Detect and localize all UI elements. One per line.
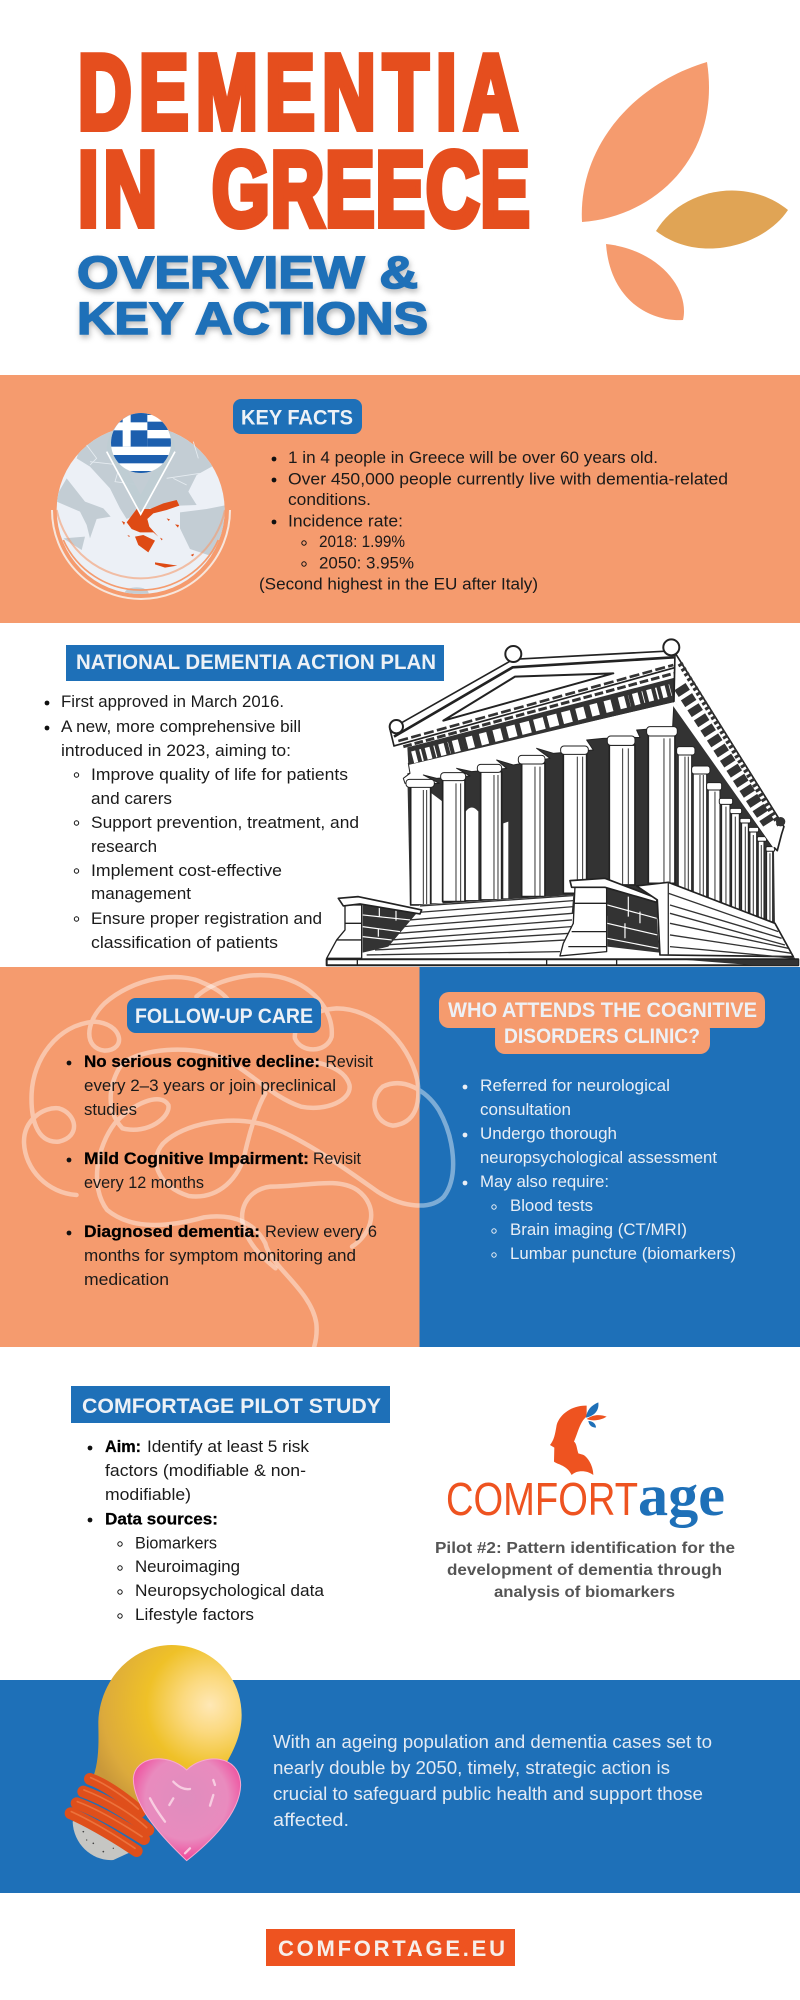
text: pilot list: Biomarkers	[135, 1534, 217, 1552]
text: who attends list: Referred for neurological	[480, 1076, 670, 1095]
back column stubs	[432, 793, 508, 903]
text: follow-up list: every 12 months	[84, 1173, 204, 1192]
text: who attends list: neuropsychological assessment	[480, 1148, 717, 1167]
heading: who attends: DISORDERS CLINIC?	[504, 1024, 700, 1048]
base	[327, 959, 798, 965]
logo: comfortage: COMFORT	[446, 1473, 638, 1525]
text: pilot list: Identify at least 5 risk	[147, 1437, 310, 1456]
icon: greek temple	[327, 639, 798, 965]
text: key facts list: 2050: 3.95%	[319, 554, 414, 572]
front columns	[411, 735, 675, 905]
text: national plan list: Implement cost-effective	[91, 861, 282, 880]
text: national plan list: management	[91, 884, 191, 903]
capitals	[406, 727, 677, 787]
text: who attends list: Undergo thorough	[480, 1124, 617, 1143]
panel: conclusion	[0, 1645, 800, 1893]
side roof	[674, 653, 784, 851]
text: national plan list: Ensure proper registration and	[91, 909, 322, 928]
text: who attends list: Lumbar puncture (biomarkers)	[510, 1244, 736, 1263]
title: GREECE	[212, 130, 530, 249]
text: national plan list: and carers	[91, 789, 172, 808]
text: key facts list: 2018: 1.99%	[319, 532, 405, 551]
footer: website	[266, 1929, 515, 1966]
text: who attends list: May also require:	[480, 1172, 609, 1191]
stairs	[363, 895, 573, 958]
text: conclusion: With an ageing population and dementia cases set to	[273, 1732, 712, 1752]
entablature	[403, 702, 674, 783]
text: who attends list: Blood tests	[510, 1196, 593, 1215]
text: key facts list: conditions.	[288, 490, 371, 509]
text: pilot list	[88, 1437, 325, 1624]
text: follow-up list	[67, 1052, 377, 1289]
panel: comfortage pilot study	[71, 1386, 735, 1624]
icon: map of Greece with flag pin	[52, 412, 230, 599]
icon: light bulb with heart	[71, 1645, 242, 1861]
text: key facts list: Incidence rate:	[288, 512, 403, 530]
heading: key facts: KEY FACTS	[241, 406, 353, 430]
heading: national plan	[66, 645, 444, 681]
text: national plan list: A new, more comprehensive bill	[61, 717, 301, 736]
text: conclusion: crucial to safeguard public health and support those	[273, 1784, 703, 1804]
text: who attends list: Brain imaging (CT/MRI)	[510, 1220, 687, 1239]
heading: who attends: WHO ATTENDS THE COGNITIVE	[448, 998, 757, 1022]
text: pilot caption: development of dementia through	[447, 1562, 722, 1579]
logo: comfortage: age	[638, 1462, 725, 1528]
heading: national plan: NATIONAL DEMENTIA ACTION PLAN	[76, 650, 436, 674]
heading: follow-up care: FOLLOW-UP CARE	[135, 1004, 313, 1028]
text: pilot list: Neuropsychological data	[135, 1581, 325, 1600]
text: key facts list	[259, 448, 728, 594]
icon: leaves	[582, 62, 788, 320]
subtitle: OVERVIEW &	[77, 247, 418, 298]
subtitle	[77, 247, 428, 344]
left plinth	[327, 905, 362, 958]
panel: key facts	[0, 375, 800, 623]
pediment and cornice	[390, 651, 676, 746]
text: follow-up list: every 2–3 years or join preclinical	[84, 1076, 336, 1095]
text: pilot list: modifiable)	[105, 1485, 191, 1504]
logo: comfortage	[446, 1402, 725, 1528]
footer: website: COMFORTAGE.EU	[278, 1936, 505, 1961]
title: IN	[78, 130, 157, 249]
text: who attends list	[463, 1076, 736, 1263]
text: pilot list: factors (modifiable & non-	[105, 1461, 306, 1480]
text: national plan list: research	[91, 837, 157, 856]
heading: who attends	[439, 992, 765, 1054]
text: national plan list: introduced in 2023, aiming to:	[61, 741, 291, 760]
text: conclusion: nearly double by 2050, timely, strategic action is	[273, 1758, 670, 1778]
text: pilot caption	[435, 1540, 735, 1601]
text: national plan list	[45, 692, 359, 952]
squiggle line	[24, 975, 453, 1348]
side capitals	[677, 747, 775, 851]
text: pilot list: Aim:	[105, 1438, 141, 1456]
icon: Greece mainland and islands	[122, 500, 194, 568]
text: follow-up list: Diagnosed dementia:	[84, 1223, 260, 1241]
text: national plan list: First approved in March 2016.	[61, 692, 284, 711]
text: pilot list: Data sources:	[105, 1510, 218, 1528]
text: follow-up list: studies	[84, 1100, 137, 1119]
text: who attends list: consultation	[480, 1100, 571, 1119]
text: follow-up list: Revisit	[326, 1052, 373, 1071]
text: key facts list: 1 in 4 people in Greece will be over 60 years old.	[288, 448, 658, 467]
text: national plan list: Improve quality of life for patients	[91, 765, 348, 784]
text: follow-up list: Mild Cognitive Impairment:	[84, 1150, 309, 1168]
text: key facts list: (Second highest in the EU after Italy)	[259, 574, 538, 594]
panel: national dementia action plan	[45, 639, 798, 965]
side columns	[678, 752, 773, 923]
heading: pilot study: COMFORTAGE PILOT STUDY	[82, 1394, 381, 1418]
text: follow-up list: No serious cognitive decline:	[84, 1053, 320, 1071]
text: follow-up list: Revisit	[313, 1149, 361, 1168]
heading: pilot study	[71, 1386, 390, 1423]
frieze	[407, 678, 675, 765]
acroteria	[390, 639, 679, 733]
text: conclusion	[273, 1732, 712, 1830]
title	[78, 33, 530, 249]
subtitle: KEY ACTIONS	[77, 293, 428, 344]
text: national plan list: Support prevention, treatment, and	[91, 813, 359, 832]
text: follow-up list: months for symptom monitoring and	[84, 1246, 356, 1265]
text: follow-up list: Review every 6	[265, 1222, 377, 1241]
text: national plan list: classification of patients	[91, 933, 278, 952]
icon: flag	[111, 413, 171, 473]
text: pilot list: Lifestyle factors	[135, 1605, 254, 1624]
text: pilot caption: analysis of biomarkers	[494, 1584, 675, 1601]
heading: key facts	[233, 399, 362, 434]
right steps	[637, 882, 793, 957]
text: pilot caption: Pilot #2: Pattern identification for the	[435, 1540, 735, 1557]
heading: follow-up care	[127, 998, 321, 1033]
panel: who attends the clinic	[420, 967, 800, 1347]
panel: follow-up care	[0, 967, 420, 1347]
text: key facts list: Over 450,000 people currently live with dementia-related	[288, 470, 728, 488]
text: pilot list: Neuroimaging	[135, 1557, 240, 1576]
center plinth	[560, 887, 607, 956]
text: follow-up list: medication	[84, 1270, 169, 1289]
text: conclusion: affected.	[273, 1810, 349, 1830]
title: DEMENTIA	[78, 33, 518, 152]
